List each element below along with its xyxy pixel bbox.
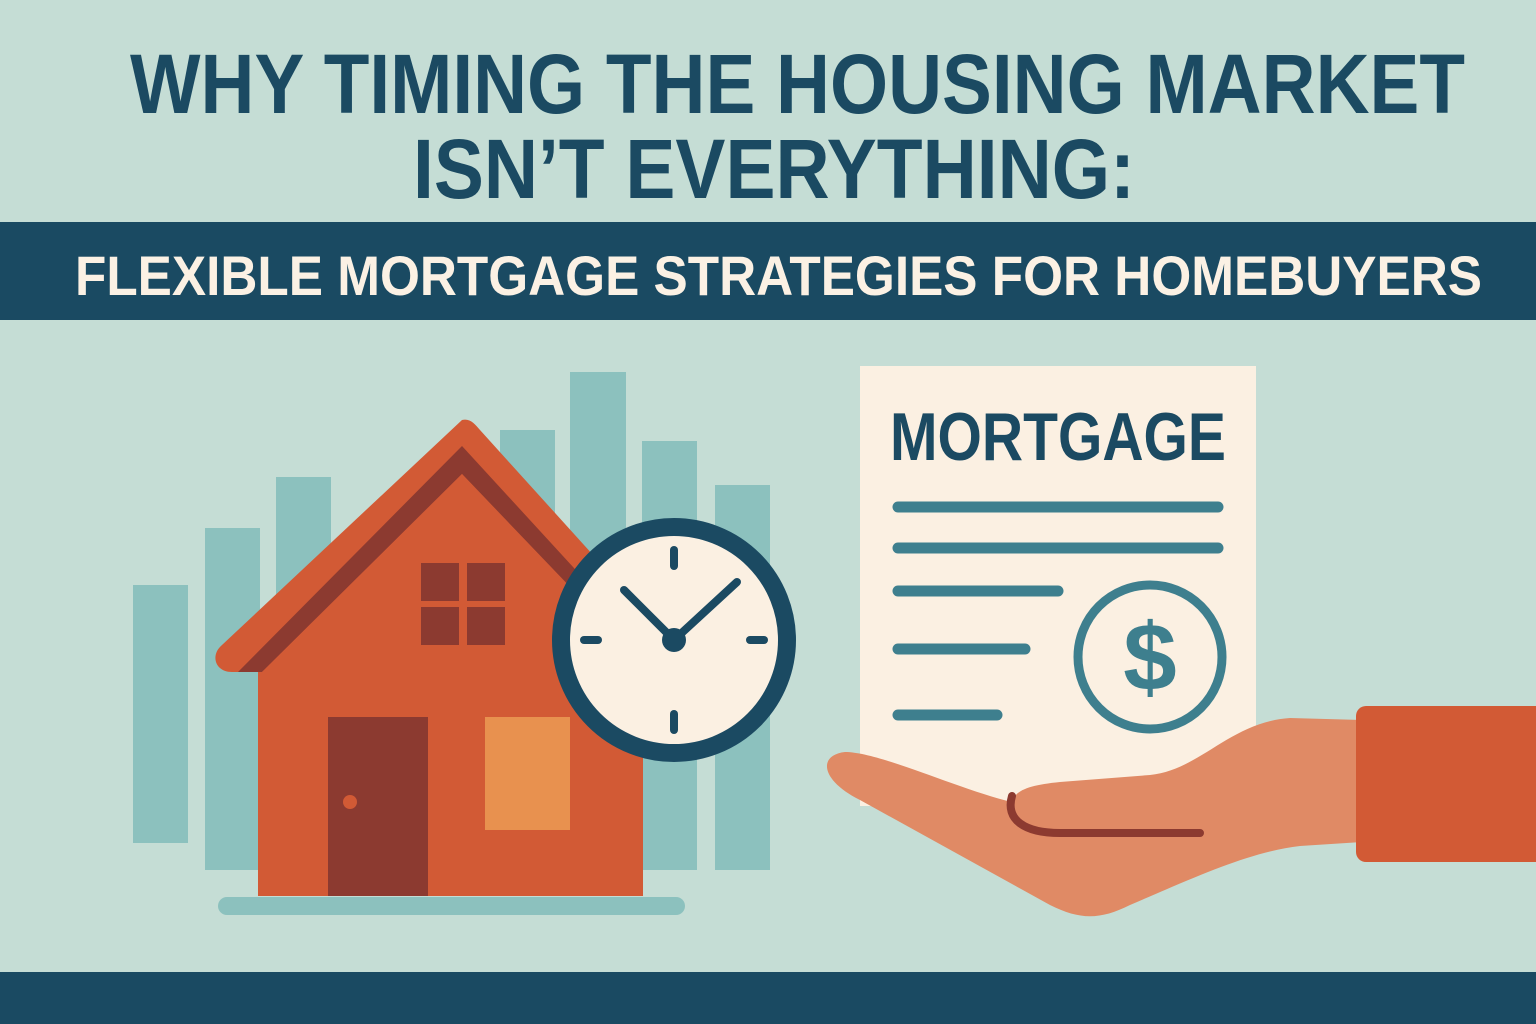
- title: ISN’T EVERYTHING:: [413, 122, 1135, 216]
- window: [421, 563, 505, 645]
- icon: mortgage document: MORTGAGE: [890, 399, 1226, 475]
- subtitle band: [0, 222, 1536, 320]
- icon: house: [215, 420, 650, 896]
- bar chart background: [133, 372, 770, 870]
- title: [130, 37, 1465, 216]
- icon: mortgage document: [860, 366, 1256, 806]
- door: [328, 717, 428, 896]
- icon: clock: [561, 527, 787, 753]
- icon: mortgage document: $: [1123, 604, 1177, 711]
- bottom band: [0, 972, 1536, 1024]
- ground line: [218, 897, 685, 915]
- icon: hand holding document: [827, 706, 1536, 916]
